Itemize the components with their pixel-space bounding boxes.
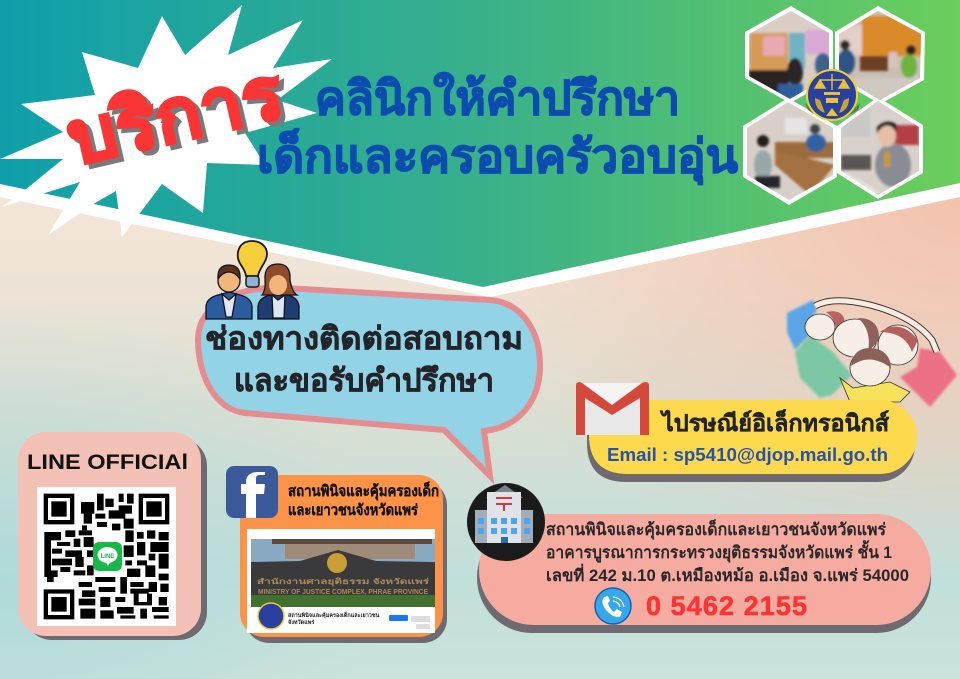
address: สถานพินิจและคุ้มครองเด็กและเยาวชนจังหวัดแพร่: [546, 518, 886, 540]
icon: justice emblem: [805, 70, 860, 120]
panel: address and phone: [467, 483, 931, 633]
Facebook page screenshot: สถานพินิจและคุ้มครองเด็กและเยาวชน: [288, 611, 380, 619]
Facebook page screenshot: สำนักงานศาลยุติธรรม จังหวัดแพร่: [257, 577, 431, 586]
photo hexagon collage: [743, 6, 925, 206]
photo: meeting room: [839, 11, 921, 100]
Facebook page screenshot: [247, 529, 435, 633]
title: เด็กและครอบครัวอบอุ่น: [257, 128, 739, 185]
service badge text: บริการ: [65, 54, 296, 184]
panel: speech bubble: [198, 288, 540, 476]
icon: building: [467, 483, 545, 561]
panel: Facebook page: [226, 466, 447, 643]
QR code: [37, 487, 176, 626]
photo: counselling desk: [747, 102, 833, 200]
icon: Facebook: [226, 466, 278, 518]
email heading: ไปรษณีย์อิเล็กทรอนิกส์: [659, 408, 890, 436]
icon: phone: [595, 588, 631, 624]
panel: email: [576, 382, 917, 482]
speech bubble heading: และขอรับคำปรึกษา: [234, 363, 494, 398]
icon: woman: [258, 264, 299, 319]
starburst: [0, 5, 332, 237]
Facebook heading: สถานพินิจและคุ้มครองเด็ก: [288, 481, 439, 501]
Facebook heading: [288, 481, 439, 519]
service badge text: บริการ: [60, 50, 291, 180]
speech bubble heading: [205, 321, 523, 398]
address: [546, 518, 909, 585]
Facebook page screenshot: จังหวัดแพร่: [288, 619, 314, 626]
email address: Email : sp5410@djop.mail.go.th: [607, 445, 888, 465]
header banner: [0, 0, 960, 287]
Facebook page screenshot: MINISTRY OF JUSTICE COMPLEX, PHRAE PROVINCE: [258, 587, 428, 596]
icon: Gmail: [576, 382, 649, 435]
icon: lightbulb: [238, 241, 267, 287]
photo: reception desk: [749, 11, 829, 99]
panel: LINE official: [18, 432, 207, 640]
icon: LINE logo: LINE: [101, 554, 114, 560]
people with lightbulb icon: [206, 241, 299, 319]
title: [257, 71, 739, 185]
Facebook heading: และเยาวชนจังหวัดแพร่: [288, 502, 419, 519]
speech bubble heading: ช่องทางติดต่อสอบถาม: [205, 321, 523, 356]
address: เลขที่ 242 ม.10 ต.เหมืองหม้อ อ.เมือง จ.แพร่ 54000: [546, 563, 909, 585]
family illustration: [787, 300, 957, 407]
white band under header: [0, 150, 960, 297]
title: คลินิกให้คำปรึกษา: [315, 71, 680, 124]
LINE heading: LINE OFFICIAl: [27, 451, 188, 474]
phone number: 0 5462 2155: [646, 591, 807, 621]
photo: officer on phone: [841, 101, 919, 195]
address: อาคารบูรณาการกระทรวงยุติธรรมจังหวัดแพร่ ชั้น 1: [546, 540, 892, 564]
icon: man: [206, 265, 252, 319]
